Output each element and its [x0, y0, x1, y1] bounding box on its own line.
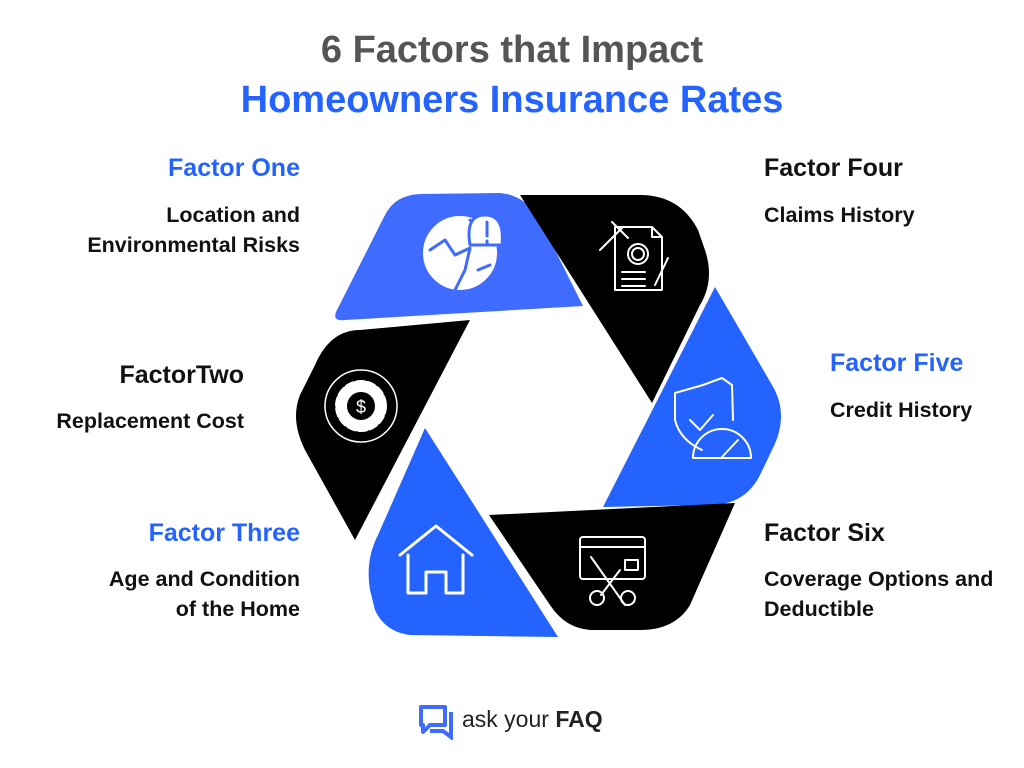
factor one label: Location and	[166, 203, 300, 227]
factor five label: Factor Five	[830, 349, 963, 377]
icon: gear dollar	[325, 370, 397, 442]
segment 1 blue	[335, 193, 583, 320]
factor five label	[830, 349, 972, 422]
segment 5 blue	[603, 287, 781, 507]
segment 4 black	[520, 195, 709, 403]
segment 2 black	[296, 320, 470, 540]
factor three label: Age and Condition	[109, 567, 300, 591]
factor two label: FactorTwo	[119, 361, 244, 389]
icon: credit card scissors	[580, 537, 645, 605]
icon: shield gauge	[675, 378, 751, 458]
factor six label	[764, 519, 993, 621]
factor three label: of the Home	[176, 597, 300, 621]
logo: ask your FAQ	[462, 706, 603, 732]
factor one label: Factor One	[168, 154, 300, 182]
factor six label: Coverage Options and	[764, 567, 993, 591]
factor one label: Environmental Risks	[87, 233, 300, 257]
icon: claims document	[600, 222, 668, 290]
factor three label: Factor Three	[149, 519, 300, 547]
icon: gear dollar: $	[356, 397, 366, 417]
title	[241, 29, 783, 121]
factor six label: Deductible	[764, 597, 874, 621]
factor one label	[87, 154, 300, 257]
title: 6 Factors that Impact	[321, 29, 703, 71]
factor four label: Claims History	[764, 203, 915, 227]
factor two label	[56, 361, 244, 433]
factor two label: Replacement Cost	[56, 409, 244, 433]
factor four label: Factor Four	[764, 154, 903, 182]
factor four label	[764, 154, 915, 227]
icon: globe warning	[424, 215, 502, 290]
factor six label: Factor Six	[764, 519, 885, 547]
factor five label: Credit History	[830, 398, 972, 422]
segment 6 black	[489, 503, 735, 630]
title: Homeowners Insurance Rates	[241, 79, 783, 121]
segment 3 blue	[369, 428, 558, 637]
icon: house	[400, 526, 472, 593]
icon: chat bubbles	[419, 705, 453, 740]
logo	[419, 705, 603, 740]
factor three label	[109, 519, 300, 621]
